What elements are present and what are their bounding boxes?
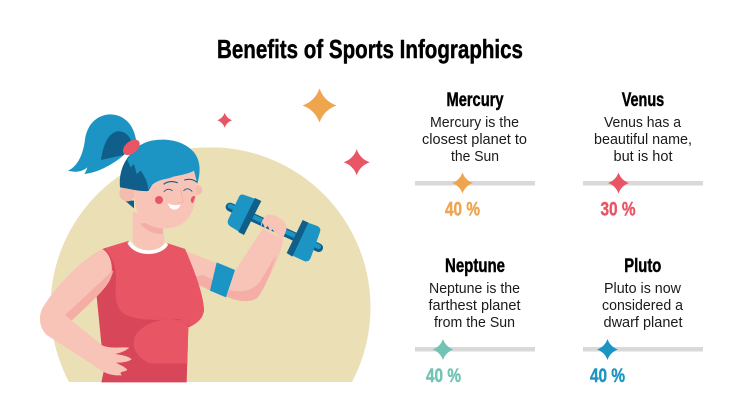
icon: orange sparkle <box>302 88 336 122</box>
ponytail <box>68 114 136 174</box>
description: Neptune: from the Sun <box>434 315 515 331</box>
value: Neptune: 40 % <box>426 366 461 387</box>
description: Pluto: dwarf planet <box>604 315 682 331</box>
shirt collar <box>129 242 167 252</box>
fist <box>260 215 287 240</box>
dumbbell <box>228 195 320 261</box>
value: Venus: 30 % <box>600 200 636 220</box>
slider: Neptune <box>415 339 535 360</box>
description: Venus: but is hot <box>614 149 672 165</box>
right arm and band <box>185 228 283 301</box>
description: Mercury <box>422 115 527 165</box>
left arm and hand <box>40 249 132 375</box>
description: Venus: Venus has a <box>604 115 682 131</box>
hair tie <box>120 137 143 158</box>
description: Mercury: Mercury is the <box>430 115 519 131</box>
description: Pluto: considered a <box>602 298 684 314</box>
slider: Mercury <box>415 172 535 194</box>
slider: Pluto <box>583 339 703 360</box>
title: Benefits of Sports Infographics <box>217 34 523 64</box>
description: Neptune: Neptune is the <box>429 281 520 297</box>
icon: small red sparkle <box>217 113 232 128</box>
value: Pluto: 40 % <box>590 366 625 387</box>
description: Venus: beautiful name, <box>594 132 692 148</box>
description: Mercury: closest planet to <box>422 132 527 148</box>
heading: Mercury: Mercury <box>446 90 504 111</box>
neck <box>133 212 165 250</box>
heading: Neptune: Neptune <box>445 256 505 277</box>
description: Neptune <box>428 281 520 331</box>
description: Pluto: Pluto is now <box>604 281 682 297</box>
head <box>119 140 202 228</box>
icon: red sparkle <box>344 149 370 175</box>
illustration: woman lifting dumbbell <box>40 114 320 382</box>
panel: Mercury <box>415 90 535 220</box>
heading: Pluto: Pluto <box>624 256 661 277</box>
heading: Venus: Venus <box>622 90 664 111</box>
panel: Venus <box>583 90 703 220</box>
shirt <box>97 241 204 382</box>
slider: Venus <box>583 172 703 194</box>
background semicircle <box>50 147 370 382</box>
panel: Pluto <box>583 256 703 387</box>
description: Mercury: the Sun <box>451 149 499 165</box>
neck shadow <box>140 222 163 234</box>
value: Mercury: 40 % <box>445 200 480 220</box>
description: Venus <box>594 115 692 165</box>
description: Neptune: farthest planet <box>428 298 520 314</box>
panel: Neptune <box>415 256 535 387</box>
description: Pluto <box>602 281 684 331</box>
